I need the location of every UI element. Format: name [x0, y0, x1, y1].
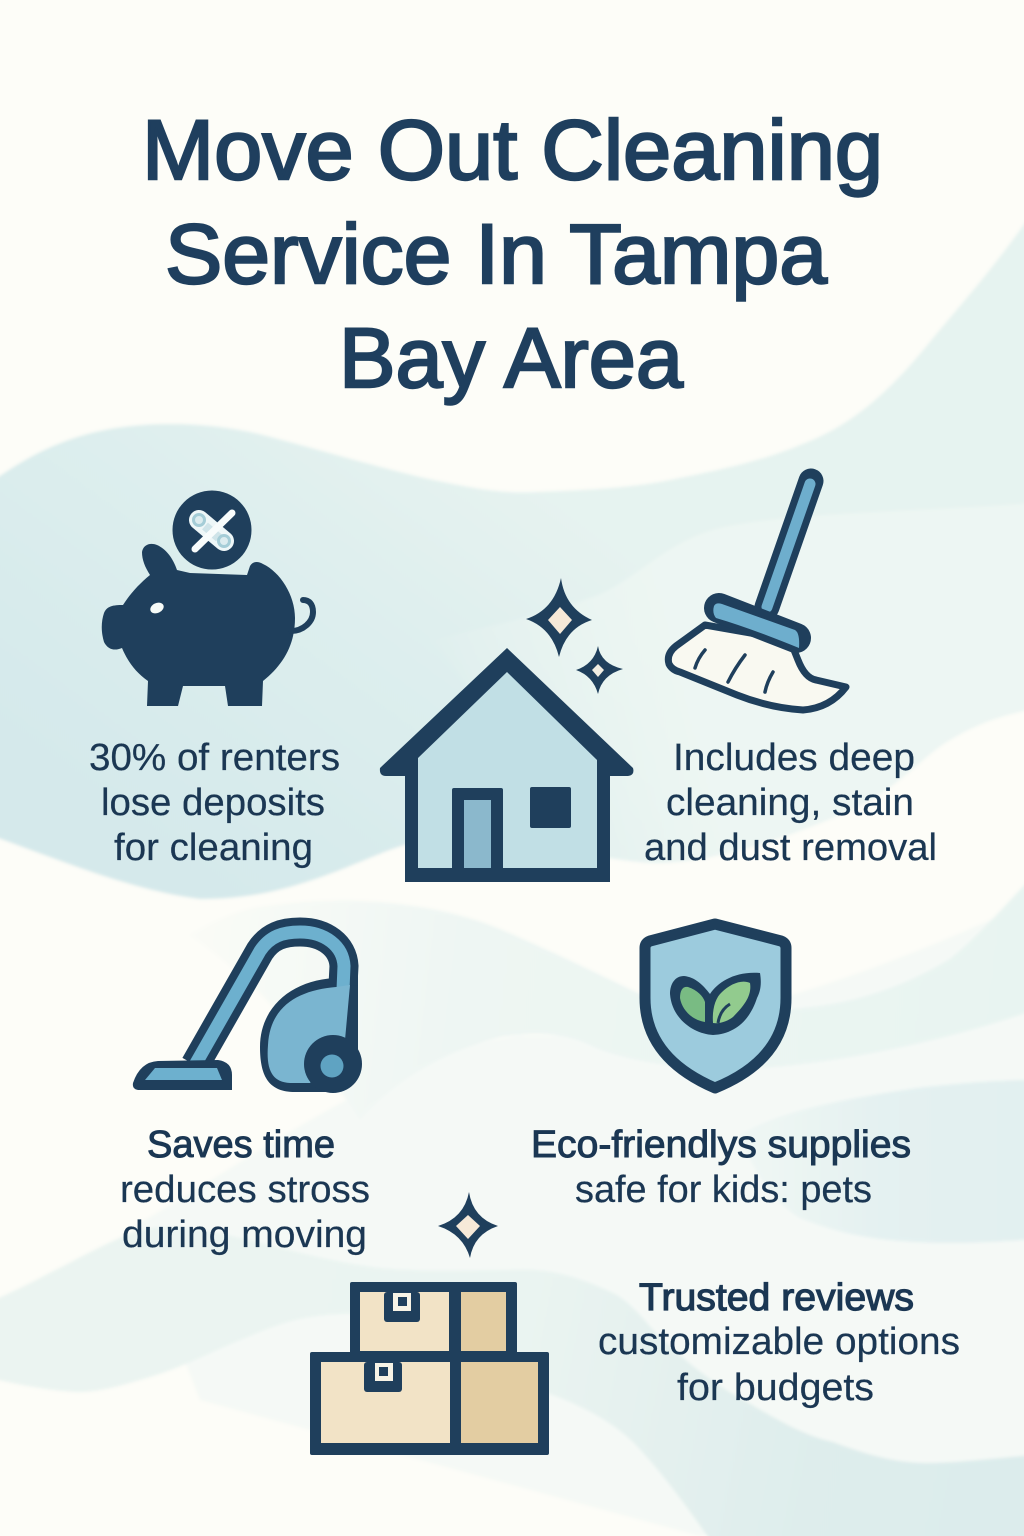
icon: sparkle	[438, 1192, 498, 1258]
title: Service In Tampa	[165, 207, 827, 301]
text: deep cleaning: Includes deep	[673, 737, 915, 779]
icon: clean house with sparkles	[380, 578, 633, 882]
text: trusted reviews: customizable options	[598, 1321, 960, 1363]
text: deposits statistic: for cleaning	[114, 827, 313, 869]
text: trusted reviews: Trusted reviews	[639, 1277, 914, 1319]
text: deep cleaning: and dust removal	[644, 827, 937, 869]
text: deposits statistic: lose deposits	[101, 782, 325, 824]
text: eco-friendly supplies: safe for kids: pets	[575, 1169, 872, 1211]
icon: stacked moving boxes	[310, 1282, 549, 1455]
text: eco-friendly supplies	[531, 1124, 911, 1211]
text: deposits statistic	[89, 737, 340, 869]
icon: eco shield with leaves	[645, 924, 786, 1088]
text: saves time: reduces stross	[120, 1169, 370, 1211]
text: eco-friendly supplies: Eco-friendlys supplies	[531, 1124, 911, 1166]
text: trusted reviews: for budgets	[677, 1367, 874, 1409]
text: deposits statistic: 30% of renters	[89, 737, 340, 779]
text: saves time	[120, 1124, 370, 1256]
icon: vacuum cleaner	[133, 932, 362, 1093]
title: Move Out Cleaning	[142, 103, 883, 197]
icon: piggy bank with percent coin	[102, 490, 313, 706]
icon: broom	[668, 481, 846, 710]
text: deep cleaning: cleaning, stain	[666, 782, 914, 824]
title	[142, 103, 883, 405]
text: deep cleaning	[644, 737, 937, 869]
title: Bay Area	[339, 311, 683, 405]
text: saves time: Saves time	[147, 1124, 335, 1166]
text: trusted reviews	[598, 1277, 960, 1409]
text: saves time: during moving	[122, 1214, 367, 1256]
